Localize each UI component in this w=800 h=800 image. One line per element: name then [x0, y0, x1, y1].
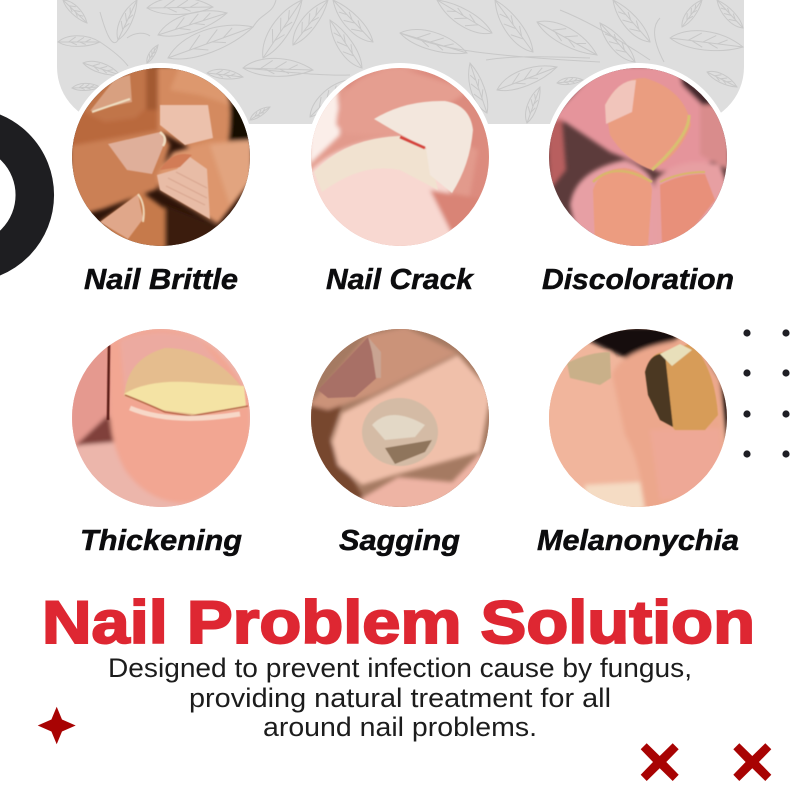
photo: thickening	[70, 327, 252, 510]
icon: red cross left	[641, 743, 679, 781]
description text: providing natural treatment for all	[189, 683, 611, 713]
photo: nail crack	[306, 63, 494, 251]
title: Nail Problem Solution	[42, 589, 755, 656]
photo: discoloration	[544, 63, 732, 251]
description text	[108, 653, 692, 742]
label: Nail Crack: Nail Crack	[326, 264, 475, 296]
label: Thickening: Thickening	[80, 525, 242, 557]
label: Discoloration: Discoloration	[542, 264, 734, 296]
label: Sagging: Sagging	[339, 525, 460, 557]
background leaf panel	[57, 0, 746, 124]
photo: sagging	[309, 327, 491, 510]
photo: melanonychia	[547, 327, 729, 510]
label: Melanonychia: Melanonychia	[537, 525, 739, 557]
description text: around nail problems.	[263, 712, 537, 742]
label: Nail Brittle: Nail Brittle	[84, 264, 238, 296]
icon: red cross right	[733, 743, 771, 781]
icon: four-point star	[38, 707, 76, 744]
photo: nail brittle	[67, 60, 255, 251]
dot grid	[743, 329, 790, 458]
decorative black ring	[0, 127, 35, 263]
description text: Designed to prevent infection cause by fungus,	[108, 653, 692, 683]
